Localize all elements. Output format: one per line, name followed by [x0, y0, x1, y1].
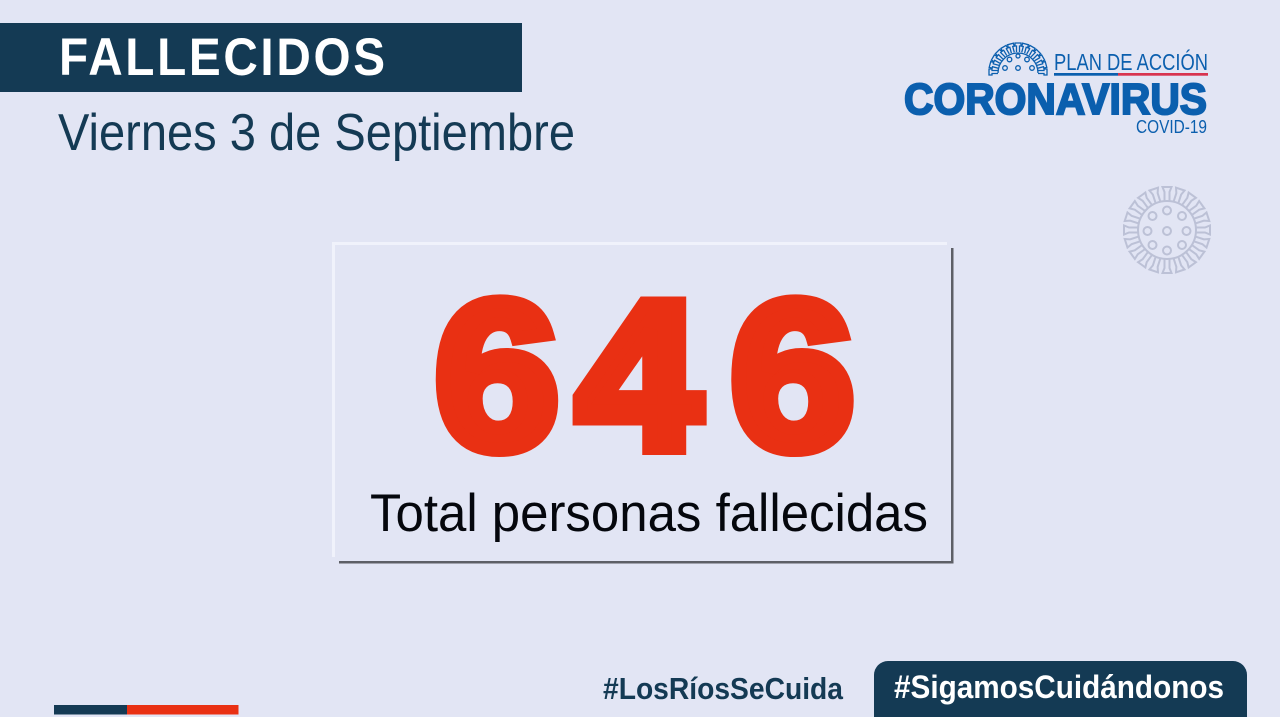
caption: Total personas fallecidas — [370, 484, 928, 543]
logo text: plan de acción: PLAN DE ACCIÓN — [1054, 49, 1208, 75]
date subtitle: Viernes 3 de Septiembre — [58, 104, 575, 162]
icon: half virus — [989, 43, 1047, 75]
header: title banner: FALLECIDOS — [59, 27, 385, 87]
hashtag box — [874, 661, 1247, 717]
logo: Plan de Acción Coronavirus — [904, 43, 1208, 137]
logo rule — [1054, 73, 1208, 76]
logo text: covid-19: COVID-19 — [1136, 117, 1207, 137]
hashtag box: #SigamosCuidándonos — [894, 669, 1224, 705]
panel: total deaths — [332, 242, 954, 564]
big number: 646 — [435, 258, 854, 493]
logo text: coronavirus: CORONAVIRUS — [904, 75, 1207, 124]
footer colour bar — [54, 705, 238, 714]
header: title banner — [0, 23, 522, 92]
panel frame — [332, 242, 954, 564]
hashtag: Los Ríos: #LosRíosSeCuida — [603, 671, 844, 706]
icon: virus — [1124, 187, 1210, 273]
